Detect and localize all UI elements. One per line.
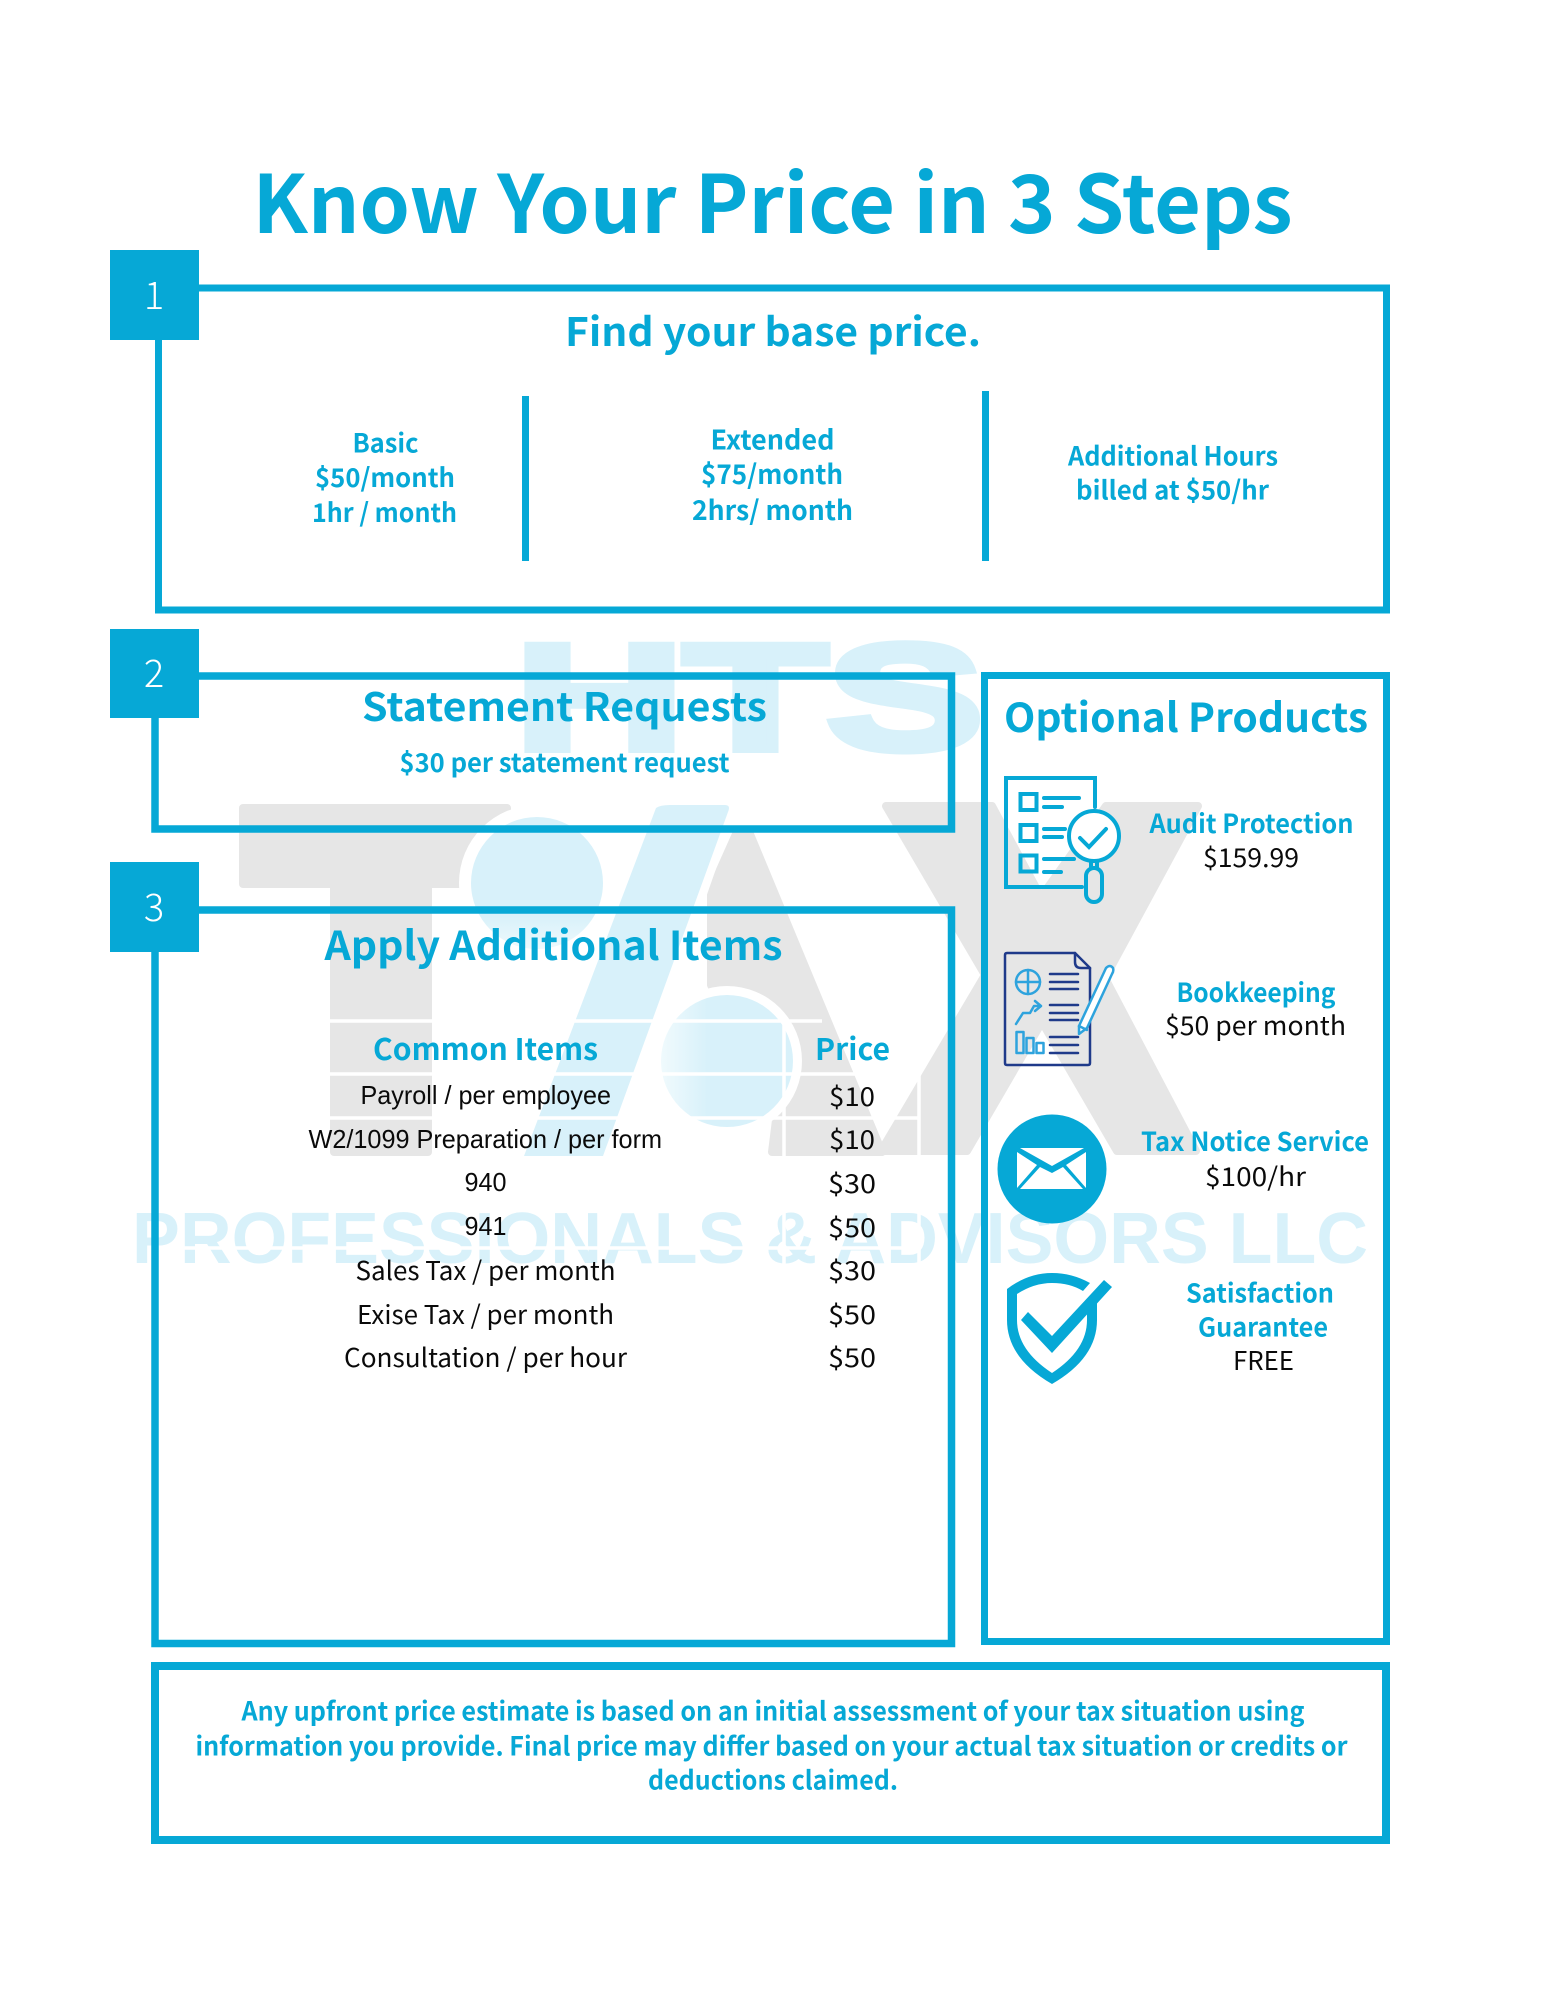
icon: audit checklist with magnifier: [1006, 778, 1119, 902]
plan: extended: [692, 418, 853, 528]
pricing table: $10: [829, 1077, 875, 1114]
pricing table: $50: [828, 1295, 876, 1332]
product: bookkeeping: [1165, 973, 1346, 1043]
step 1 number tag: 1: [144, 265, 164, 320]
panel: optional products: [984, 676, 1386, 1642]
icon: bookkeeping document with pencil: [1005, 953, 1113, 1065]
product: tax notice service: [1141, 1122, 1369, 1194]
icon: shield with check: [1007, 1273, 1112, 1384]
product: tax notice service: Tax Notice Service: [1141, 1122, 1369, 1159]
pricing table: $50: [828, 1208, 876, 1245]
disclaimer text: [196, 1692, 1348, 1798]
product: audit protection: $159.99: [1203, 838, 1299, 875]
plan: additional hours: Additional Hours: [1067, 436, 1278, 474]
product: bookkeeping: $50 per month: [1165, 1006, 1346, 1043]
panel: step 1 base price: [158, 288, 1386, 610]
icon: envelope in circle: [998, 1114, 1106, 1224]
step 3 number tag: [110, 862, 199, 952]
pricing table: W2/1099 Preparation / per form: [308, 1124, 662, 1154]
step 1 number tag: [110, 250, 199, 340]
pricing table: Consultation / per hour: [344, 1338, 628, 1375]
pricing table: $30: [828, 1251, 876, 1288]
product: audit protection: Audit Protection: [1149, 804, 1354, 841]
product: bookkeeping: Bookkeeping: [1176, 973, 1336, 1010]
watermark: HTS letters: HTS: [515, 613, 983, 781]
title: Know Your Price in 3 Steps: [252, 141, 1292, 257]
watermark: company name: PROFESSIONALS & ADVISORS LLC: [132, 1199, 1368, 1279]
pricing table: $50: [828, 1338, 876, 1375]
plan: additional hours: billed at $50/hr: [1076, 470, 1270, 508]
pricing table: 941: [464, 1211, 506, 1241]
product: tax notice service: $100/hr: [1205, 1157, 1307, 1194]
watermark: TAX grey shapes: [243, 806, 1198, 1152]
pricing table: Exise Tax / per month: [357, 1295, 614, 1332]
pricing table: $30: [828, 1164, 876, 1201]
pricing table: Price: [815, 1025, 890, 1069]
step 2 price text: $30 per statement request: [400, 743, 730, 780]
pricing table: Payroll / per employee: [360, 1080, 611, 1110]
plan: extended: $75/month: [701, 453, 843, 492]
step 2 number tag: [110, 629, 199, 718]
plan: basic: 1hr / month: [312, 493, 457, 530]
panel: step 3 additional items: [155, 910, 952, 1644]
panel: disclaimer: [155, 1666, 1386, 1840]
watermark: percent sign: [459, 805, 802, 1160]
panel: step 2 statement requests: [155, 676, 952, 829]
pricing table: Sales Tax / per month: [356, 1251, 616, 1288]
disclaimer text: deductions claimed.: [648, 1760, 898, 1798]
product: satisfaction guarantee: [1186, 1274, 1334, 1378]
plan: basic: Basic: [352, 424, 418, 460]
plan: extended: Extended: [710, 418, 834, 458]
step 3 number tag: 3: [144, 877, 164, 932]
plan: additional hours: [1067, 436, 1278, 508]
disclaimer text: information you provide. Final price may differ based on your actual tax situation or credits or: [196, 1726, 1348, 1764]
pricing table: $10: [829, 1120, 875, 1157]
step 2 number tag: 2: [144, 643, 164, 698]
plan: basic: [312, 424, 457, 530]
product: satisfaction guarantee: Satisfaction: [1186, 1274, 1334, 1310]
product: satisfaction guarantee: FREE: [1233, 1341, 1294, 1378]
plan: basic: $50/month: [315, 458, 455, 495]
watermark logo: [132, 613, 1368, 1279]
optional products heading: Optional Products: [1004, 686, 1368, 744]
product: satisfaction guarantee: Guarantee: [1198, 1308, 1328, 1344]
disclaimer text: Any upfront price estimate is based on an initial assessment of your tax situation using: [241, 1692, 1305, 1728]
step 2 heading: Statement Requests: [362, 677, 767, 733]
plan: extended: 2hrs/ month: [692, 489, 853, 528]
step 1 heading: Find your base price.: [565, 302, 981, 358]
step 3 heading: Apply Additional Items: [323, 914, 782, 972]
pricing table: [183, 1021, 919, 1375]
pricing table: 940: [464, 1167, 506, 1197]
product: audit protection: [1149, 804, 1354, 875]
pricing table: Common Items: [373, 1025, 598, 1069]
